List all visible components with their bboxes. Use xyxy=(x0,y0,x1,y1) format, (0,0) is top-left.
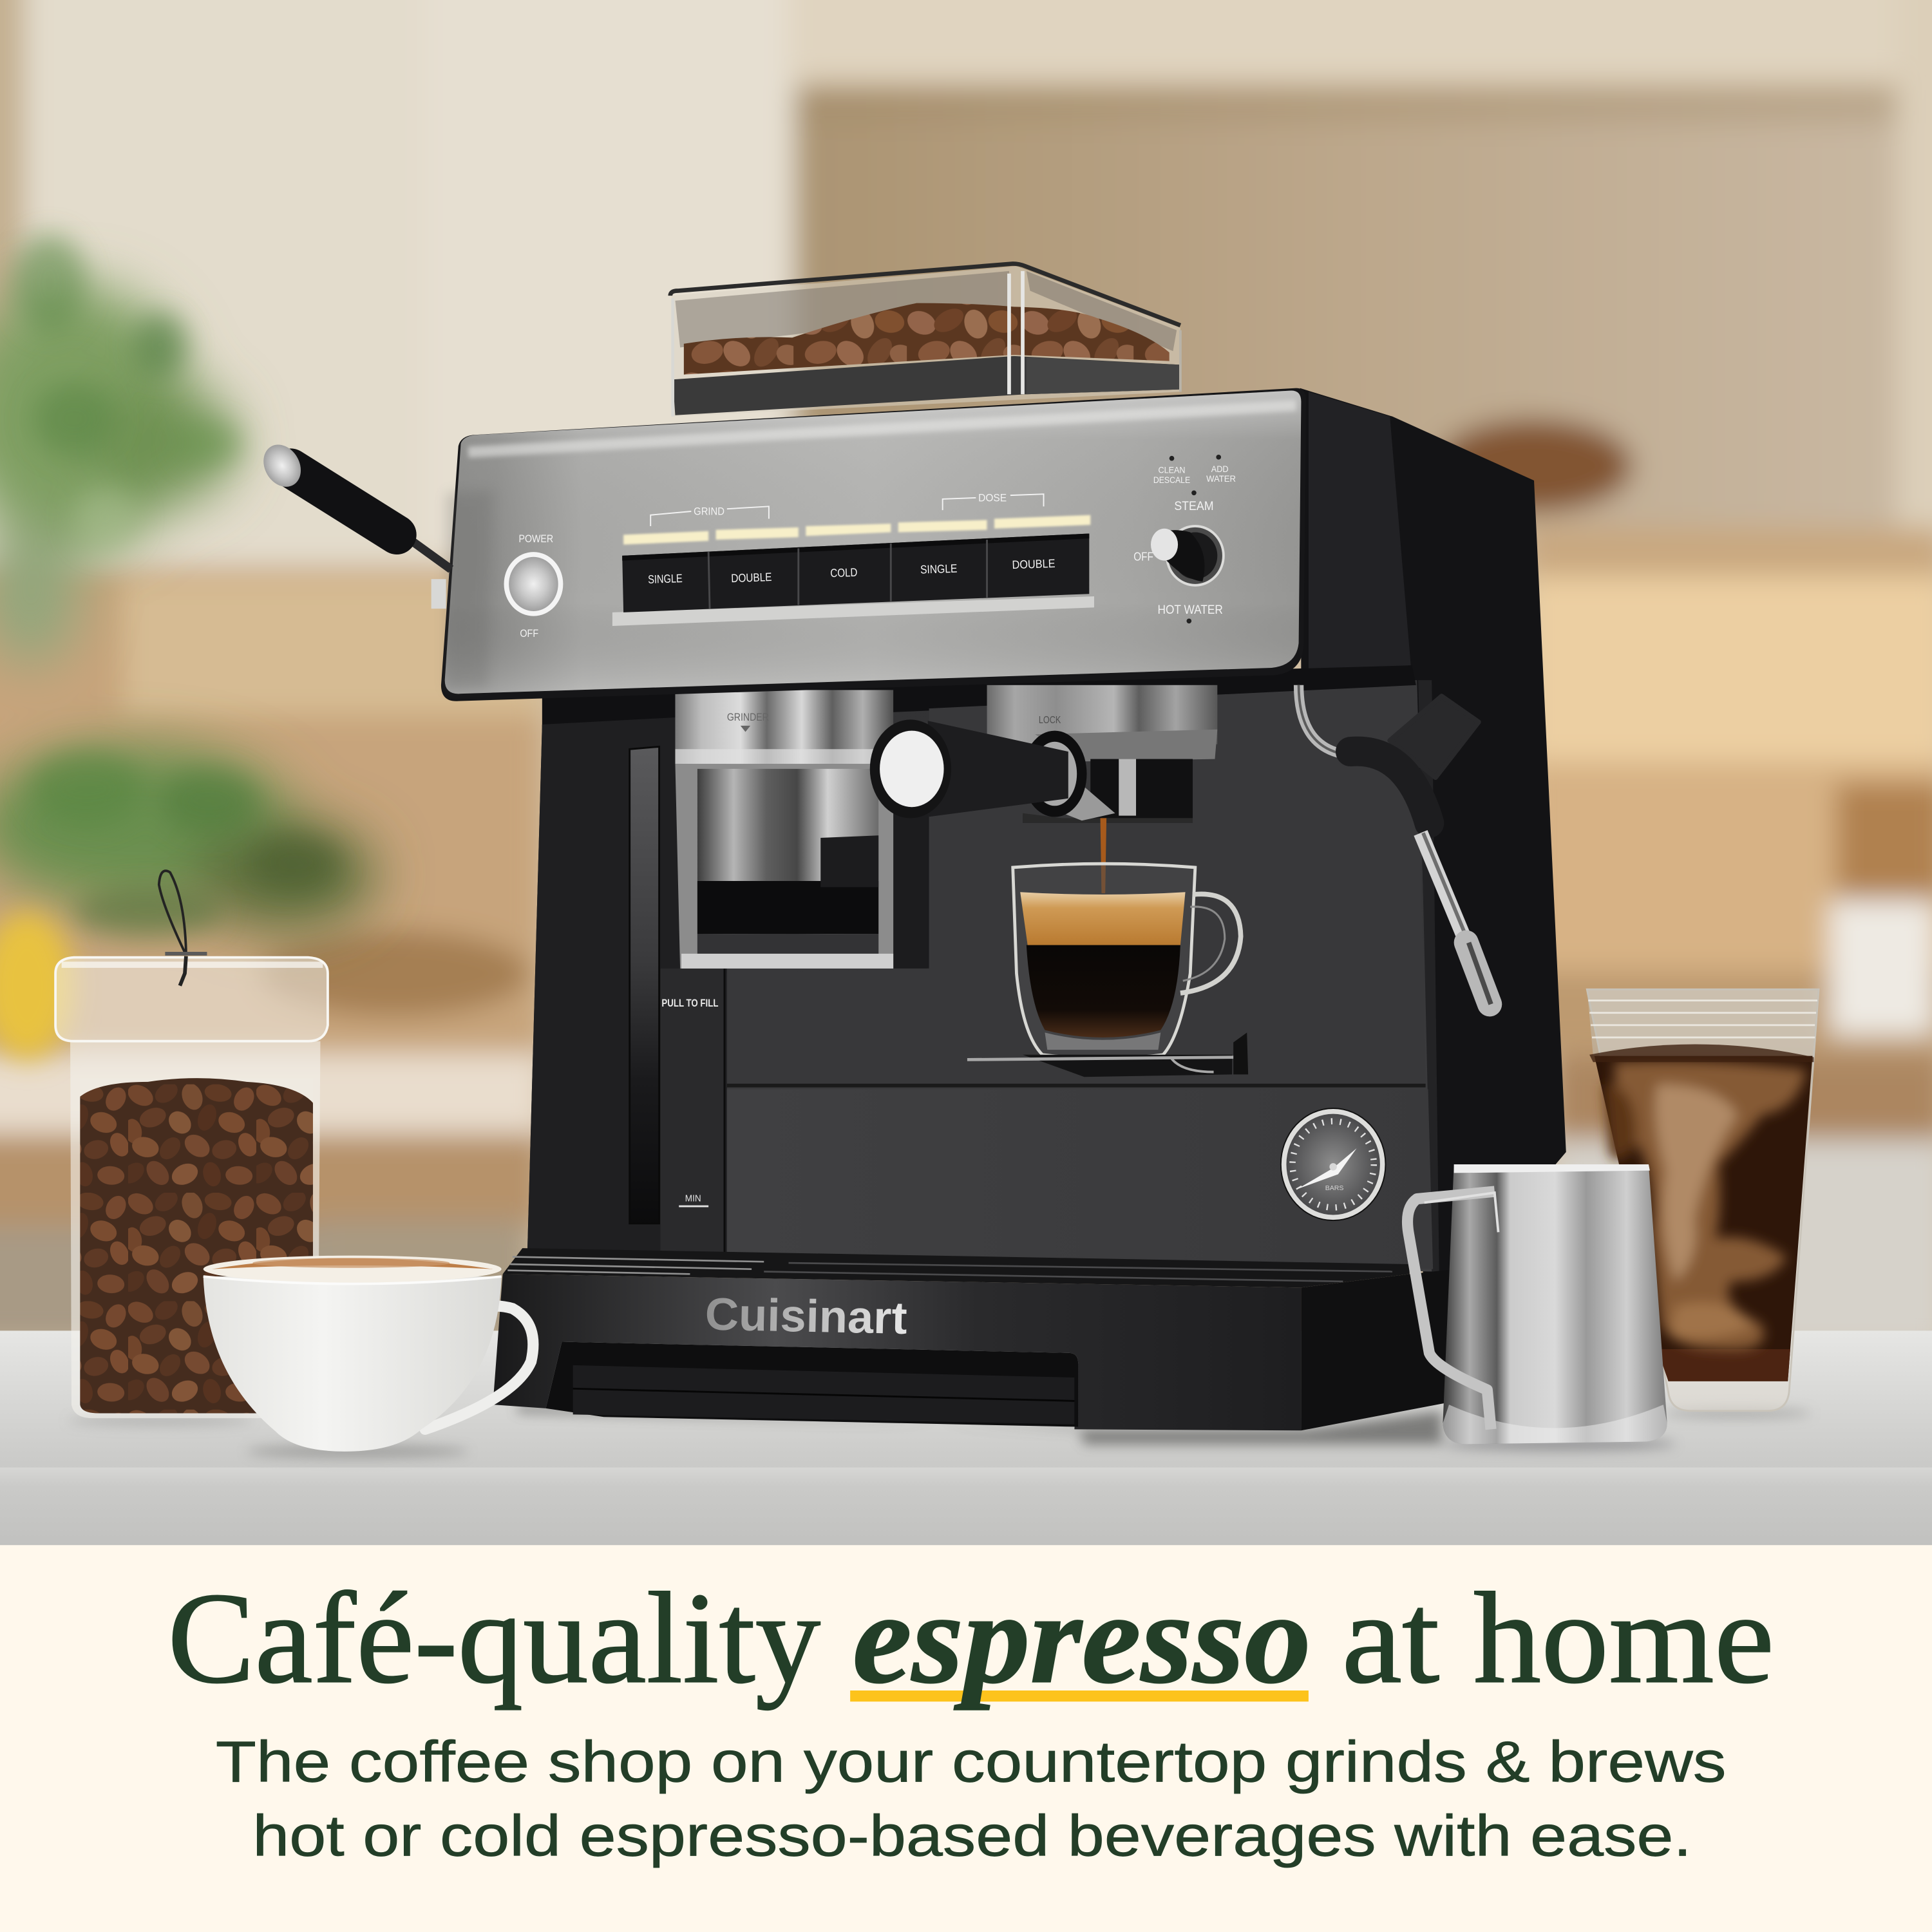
brew head xyxy=(987,685,1217,823)
label: hot water: HOT WATER xyxy=(1158,603,1223,617)
label: water: WATER xyxy=(1206,474,1236,484)
power knob xyxy=(504,533,563,639)
grind and dose brackets xyxy=(650,494,1044,526)
button: cold: COLD xyxy=(830,566,858,580)
metal milk pitcher xyxy=(1408,1164,1667,1444)
headline: espresso xyxy=(853,1566,1311,1710)
button: dose double: DOUBLE xyxy=(1012,557,1056,571)
drip tray xyxy=(493,1248,1456,1430)
pressure gauge xyxy=(1280,1108,1386,1221)
grinder chamber xyxy=(675,690,893,969)
headline xyxy=(167,1566,1774,1710)
status labels xyxy=(1133,455,1236,623)
left water tank column xyxy=(527,715,727,1255)
bean hopper xyxy=(670,263,1180,417)
button: grind single: SINGLE xyxy=(648,572,683,586)
espresso machine xyxy=(256,263,1566,1430)
kitchen background photo xyxy=(0,0,1932,1349)
portafilter handle xyxy=(870,719,1087,818)
coffee stream xyxy=(1101,818,1106,893)
contact shadows on counter xyxy=(68,1405,1812,1457)
white cappuccino cup xyxy=(204,1256,533,1452)
label: pull to fill: PULL TO FILL xyxy=(661,998,718,1009)
button: dose single: SINGLE xyxy=(920,562,958,576)
button bar xyxy=(622,533,1089,612)
brew recess xyxy=(727,685,1426,1084)
espresso glass cup xyxy=(1013,864,1241,1058)
subheading xyxy=(216,1730,1726,1868)
steel control panel xyxy=(441,388,1306,701)
front body side strip xyxy=(1418,680,1439,1271)
label: grinder: GRINDER xyxy=(727,712,769,723)
power knob: POWER xyxy=(518,533,553,545)
shadow under panel xyxy=(542,665,1417,727)
brand: Cuisinart: Cuisinart xyxy=(705,1289,907,1344)
headline: Café-quality xyxy=(167,1566,820,1710)
label: off: OFF xyxy=(1133,551,1153,564)
drip rack xyxy=(967,1032,1248,1077)
lower panel xyxy=(727,1089,1433,1269)
indicator lights xyxy=(623,515,1090,545)
button: grind double: DOUBLE xyxy=(731,571,772,585)
label: clean: CLEAN xyxy=(1158,466,1186,475)
iced coffee glass xyxy=(1587,989,1819,1411)
label: min: MIN xyxy=(685,1193,701,1204)
side housing highlight panel xyxy=(1309,392,1411,673)
caption panel xyxy=(0,1545,1932,1932)
coffee bean jar xyxy=(55,871,328,1418)
front body xyxy=(527,680,1434,1271)
steam dial xyxy=(1151,526,1224,585)
headline: at home xyxy=(1342,1566,1774,1710)
right side housing xyxy=(1300,388,1566,1282)
grinder support column xyxy=(893,813,929,969)
jar loop tag xyxy=(159,871,207,986)
power knob: OFF xyxy=(520,628,538,639)
left lever xyxy=(256,438,451,609)
label: descale: DESCALE xyxy=(1153,475,1190,485)
label: steam: STEAM xyxy=(1174,500,1214,513)
label: add: ADD xyxy=(1211,464,1229,474)
label: bars: BARS xyxy=(1325,1184,1343,1192)
subheading: hot or cold espresso-based beverages with ease. xyxy=(252,1804,1692,1868)
subheading: The coffee shop on your countertop grinds & brews xyxy=(216,1730,1726,1795)
label: dose: DOSE xyxy=(978,493,1007,504)
label: lock: LOCK xyxy=(1039,715,1061,726)
countertop xyxy=(0,1331,1932,1546)
steam wand xyxy=(1299,685,1491,1004)
headline underline xyxy=(850,1690,1309,1701)
label: grind: GRIND xyxy=(694,506,724,518)
button bezel xyxy=(612,596,1094,626)
